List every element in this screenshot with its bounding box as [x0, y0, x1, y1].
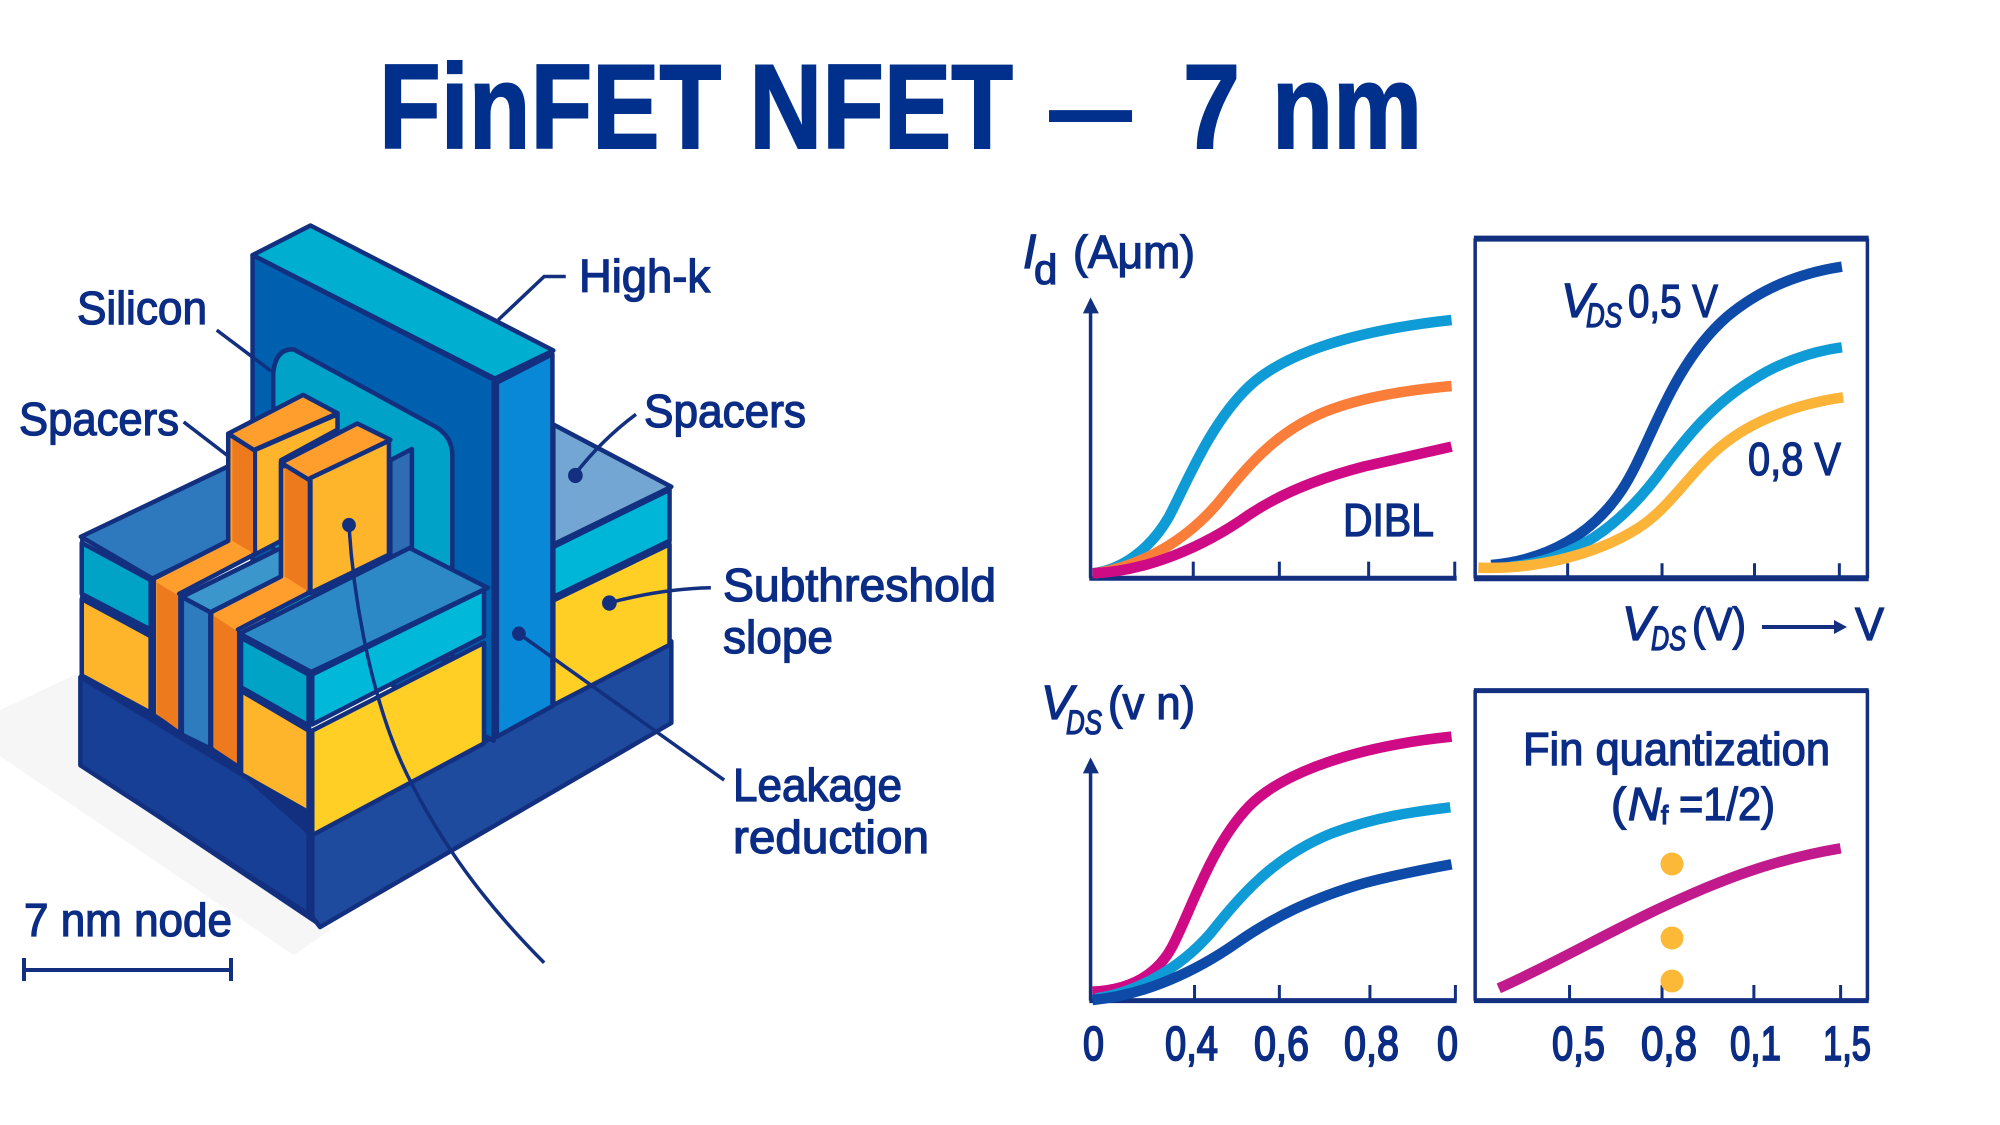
fin one and orange strip	[154, 395, 338, 732]
label: Nf = 1/2: f	[1661, 800, 1669, 830]
label: Spacers left: Spacers	[19, 393, 179, 445]
label: VDS 0,5 V: V	[1561, 275, 1597, 328]
x axis label: VDS (V) arrow V: V	[1855, 598, 1884, 650]
chart: VDS curves lower left	[1041, 677, 1457, 1001]
y axis label VDS (v n): (v n)	[1108, 677, 1195, 729]
label: Silicon: Silicon	[77, 282, 207, 334]
label: VDS 0,5 V: 0,5 V	[1628, 275, 1718, 327]
label: Leakage reduction: Leakage	[733, 759, 902, 811]
title: FinFET NFET	[379, 40, 1013, 174]
plot frame and curve	[1474, 690, 1869, 1001]
label: Fin quantization: Fin quantization	[1523, 723, 1830, 775]
plot frame and curves	[1474, 238, 1869, 578]
left drain block	[81, 466, 228, 713]
fin two and orange strip	[211, 423, 390, 765]
y axis label VDS (v n): DS	[1066, 704, 1102, 742]
x axis tick labels: 0,6	[1254, 1018, 1309, 1071]
y axis label Id: d	[1034, 246, 1057, 293]
substrate block	[80, 641, 671, 927]
leader: high-k	[498, 277, 566, 320]
x axis tick labels: 0,1	[1730, 1018, 1781, 1071]
x axis tick labels: 0,8	[1344, 1018, 1399, 1071]
x axis label: VDS (V) arrow V: (V)	[1692, 598, 1746, 650]
y axis label VDS (v n)	[1041, 677, 1195, 742]
x axis tick labels: 0	[1437, 1018, 1458, 1071]
block backing outline	[80, 424, 671, 927]
label: Leakage reduction	[733, 759, 929, 863]
high-k gate	[253, 226, 553, 741]
title: 7	[1183, 40, 1240, 174]
label: Nf = 1/2: =1/2)	[1679, 778, 1775, 830]
scale bar: 7 nm node	[24, 894, 232, 981]
x axis tick labels	[1083, 1018, 1871, 1071]
label: Nf = 1/2	[1611, 778, 1775, 830]
label: Nf = 1/2: (	[1611, 778, 1627, 830]
leader: right spacers	[568, 414, 636, 483]
label: Spacers right: Spacers	[644, 385, 806, 437]
label: High-k: High-k	[579, 250, 711, 302]
y axis label Id: I	[1023, 226, 1036, 279]
leader: subthreshold slope	[602, 588, 711, 611]
label: Subthreshold slope: Subthreshold	[723, 559, 996, 611]
floor shadow	[0, 674, 331, 955]
chart: fin quantization	[1474, 690, 1869, 1001]
label: Subthreshold slope	[723, 559, 996, 663]
title: —	[1049, 40, 1132, 174]
x axis tick labels: 0,8	[1641, 1018, 1697, 1071]
x axis tick labels: 0,4	[1165, 1018, 1218, 1071]
leader: left spacers	[184, 422, 228, 456]
curved fin leader	[342, 518, 544, 963]
leader: silicon	[217, 330, 271, 371]
x axis tick labels: 0	[1083, 1018, 1104, 1071]
label: VDS 0,5 V: DS	[1586, 297, 1622, 335]
panel: FinFET 3D diagram	[0, 226, 724, 963]
x axis label: VDS (V) arrow V: V	[1622, 598, 1658, 651]
y axis label VDS (v n): V	[1041, 677, 1077, 730]
label: Nf = 1/2: N	[1628, 778, 1662, 830]
silicon fin core	[273, 349, 452, 659]
fin one yellow face	[255, 414, 338, 555]
plot: lower left curves	[1083, 737, 1457, 1001]
label: Subthreshold slope: slope	[723, 611, 833, 663]
label: 0,8 V: 0,8 V	[1748, 433, 1841, 485]
x axis tick labels: 1,5	[1823, 1018, 1871, 1071]
small back spacer	[390, 449, 412, 567]
chart: VDS family	[1474, 238, 1869, 578]
chart: Id curves DIBL	[1023, 226, 1457, 578]
label: Leakage reduction: reduction	[733, 811, 929, 863]
y axis label Id	[1023, 226, 1195, 293]
quantized fin dots	[1660, 852, 1684, 992]
x axis tick labels: 0,5	[1552, 1018, 1605, 1071]
plot: Id curves	[1083, 297, 1457, 578]
label: VDS 0,5 V	[1561, 275, 1718, 335]
x axis label: VDS (V) arrow V	[1622, 598, 1884, 658]
label: DIBL: DIBL	[1343, 494, 1434, 546]
scale bar: 7 nm node: 7 nm node	[24, 894, 232, 946]
front drain block	[240, 548, 488, 838]
leader: leakage reduction	[512, 627, 724, 780]
x axis label: VDS (V) arrow V: DS	[1651, 620, 1686, 658]
y axis label Id: (Aμm)	[1073, 226, 1195, 278]
title: nm	[1272, 40, 1422, 174]
floor strip: blue	[182, 548, 281, 748]
right source block	[553, 424, 671, 705]
